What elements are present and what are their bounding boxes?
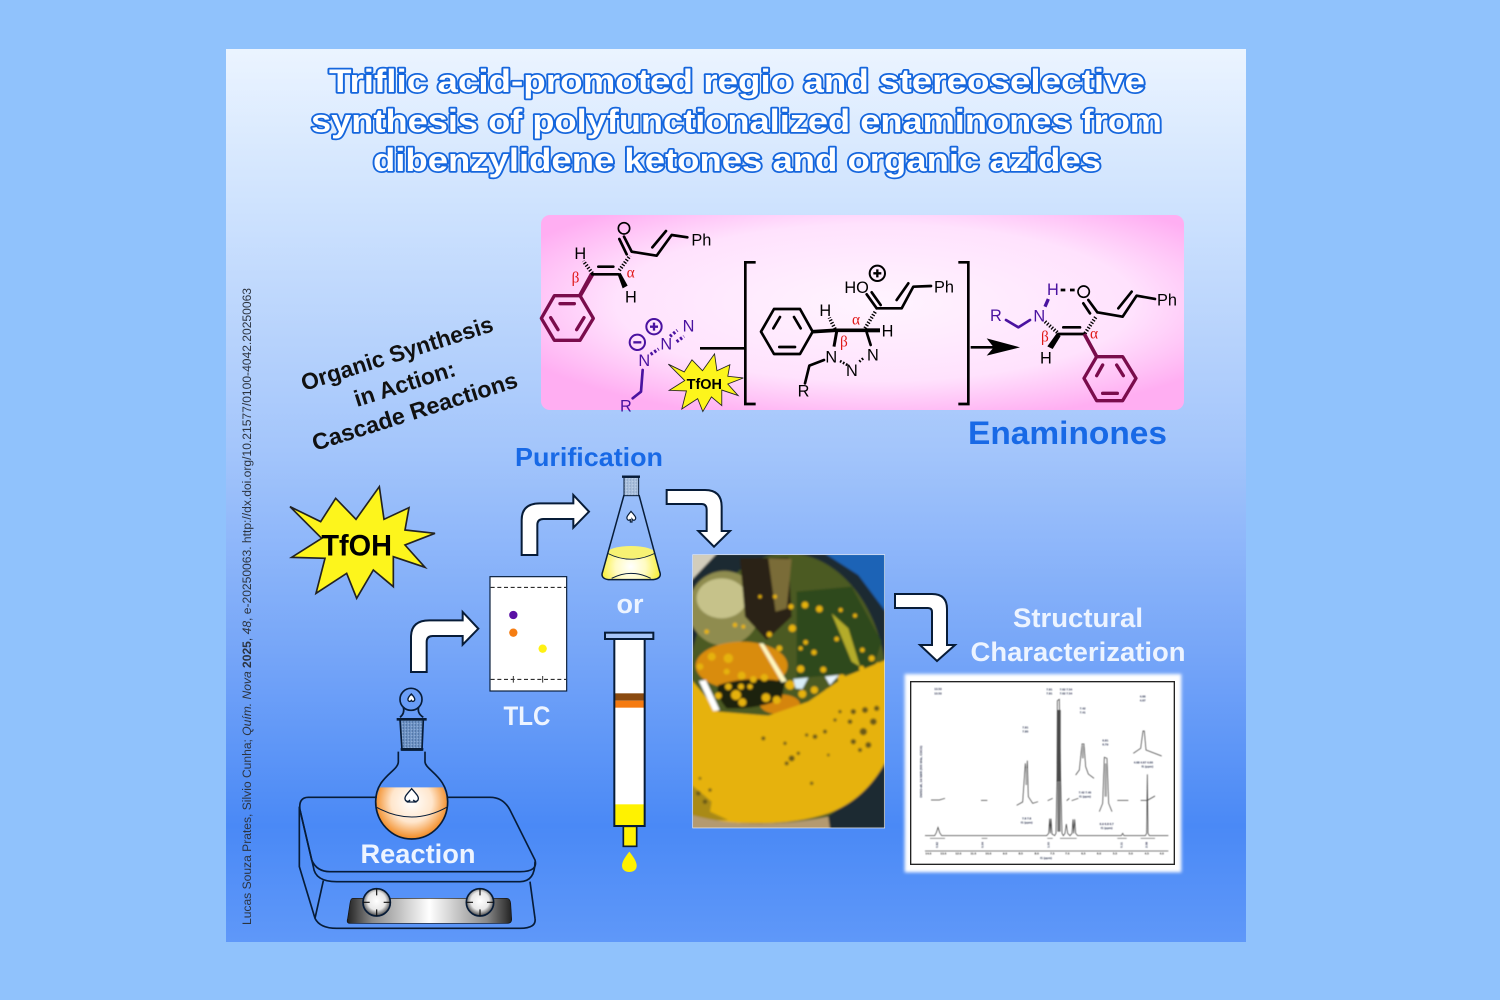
peak labels: 13.53 (934, 692, 942, 696)
starburst: TfOH large (290, 487, 435, 598)
heading: Structural Characterization: Characterization (970, 637, 1186, 667)
x axis ticks: f1 (ppm) (1040, 856, 1052, 860)
peak labels: 0.04 (980, 842, 984, 848)
heading: Structural Characterization (970, 603, 1186, 667)
peak labels: 6.79 (1102, 742, 1109, 746)
peak labels: 4.68 4.67 4.66 (1134, 760, 1153, 764)
tagline: cascade reactions (298, 311, 521, 456)
enaminone product (990, 281, 1177, 401)
enaminone product: α (1090, 325, 1098, 342)
x axis ticks: 12.0 (955, 851, 962, 855)
chromatography column (605, 633, 653, 872)
organic azide (620, 318, 694, 415)
x axis ticks: 6.5 (1081, 851, 1086, 855)
arrow: purification to product (667, 490, 730, 547)
organic azide: N (683, 318, 694, 336)
x axis ticks: 7.0 (1065, 851, 1070, 855)
x axis ticks: 11.0 (971, 851, 976, 855)
left bracket (745, 262, 756, 404)
peak labels: 13.53 (934, 687, 942, 691)
triazoline intermediate (761, 266, 954, 401)
peak labels: 7.80 (1022, 730, 1029, 734)
main trace (925, 699, 1168, 851)
enaminone product: H (1040, 349, 1052, 367)
x axis ticks: 14.0 (925, 851, 932, 855)
NMR spectrum (905, 674, 1181, 872)
label: TLC: TLC (504, 701, 550, 731)
enaminone product: Ph (1157, 292, 1177, 310)
starburst: TfOH small (668, 354, 743, 412)
x axis ticks: 7.5 (1050, 851, 1055, 855)
photo: yellow product in flask (688, 553, 887, 829)
x axis ticks: 8.0 (1035, 851, 1039, 855)
label: or: or (616, 589, 644, 619)
spectrum frame (911, 682, 1174, 864)
peak labels: f1 (ppm) (1141, 764, 1153, 768)
tagline: cascade reactions: in Action: (351, 355, 459, 412)
peak labels: 7.81 (1022, 726, 1029, 730)
panel: reaction scheme (541, 215, 1184, 415)
reaction arrow (971, 338, 1020, 356)
panel: gradient background (226, 49, 1246, 942)
triazoline intermediate: α (852, 311, 860, 328)
right bracket (958, 262, 968, 404)
enaminone product: H (1047, 281, 1059, 299)
dibenzylidene ketone: α (627, 264, 635, 281)
round-bottom flask (376, 688, 448, 843)
heading: Purification: Purification (515, 442, 663, 472)
x axis ticks: 10.0 (985, 851, 992, 855)
reaction line (700, 344, 744, 352)
spectrum glow frame (905, 674, 1181, 872)
peak labels: f1 (ppm) (1101, 826, 1113, 830)
pink panel background (541, 215, 1184, 410)
peak labels: 1.00 (1047, 842, 1051, 848)
peak labels: 4.66 (1140, 694, 1146, 698)
peak labels (919, 687, 1153, 848)
peak labels: 6.9 6.8 6.7 (1100, 822, 1114, 826)
peak labels: 0.11 (1120, 842, 1124, 848)
TLC plate (490, 577, 567, 691)
x axis ticks: 5.0 (1129, 851, 1133, 855)
triazoline intermediate: N (867, 347, 879, 365)
starburst: TfOH small: TfOH (687, 377, 722, 393)
title: Triflic acid-promoted regio and stereoselective (329, 63, 1145, 99)
x axis ticks: 6.0 (1097, 851, 1101, 855)
peak labels: 7.62 7.54 (1060, 692, 1073, 696)
hot plate and reaction flask (299, 688, 536, 928)
enaminone product: R (990, 307, 1002, 325)
peak labels: 2.08 (1144, 842, 1148, 848)
peak labels: 0.92 (935, 842, 939, 848)
peak labels: 7.42 7.40 (1079, 790, 1092, 794)
triazoline intermediate: β (840, 333, 848, 350)
peak labels: DMSO-d6, 1H NMR (500 MHz, CDCl3) (919, 746, 923, 798)
title (311, 63, 1162, 178)
title: dibenzylidene ketones and organic azides (373, 142, 1101, 178)
title: synthesis of polyfunctionalized enaminones from (311, 103, 1162, 139)
peak labels: f1 (ppm) (1021, 820, 1033, 824)
hot plate (299, 797, 536, 928)
triazoline intermediate: HO (844, 279, 869, 297)
workflow graphics (411, 477, 730, 872)
dibenzylidene ketone: Ph (691, 231, 711, 249)
spectrum contents (919, 687, 1168, 860)
starburst: TfOH large: TfOH (321, 529, 392, 562)
peak labels: 7.62 7.54 (1060, 688, 1073, 692)
dibenzylidene ketone: H (574, 245, 586, 263)
dibenzylidene ketone (541, 223, 711, 340)
Erlenmeyer flask (602, 477, 660, 580)
peak labels: 6.81 (1102, 738, 1109, 742)
heading: Structural Characterization: Structural (1013, 603, 1143, 633)
triazoline intermediate: H (882, 323, 893, 341)
triazoline intermediate: Ph (934, 278, 954, 296)
triazoline intermediate: N (825, 348, 837, 366)
peak labels: 7.42 (1080, 706, 1086, 710)
organic azide: R (620, 397, 632, 415)
peak labels: 7.81 (1046, 692, 1053, 696)
tagline: cascade reactions: Cascade Reactions (309, 367, 521, 456)
x axis ticks: 9.0 (1003, 851, 1007, 855)
x axis ticks (925, 851, 1164, 860)
tagline: cascade reactions: Organic Synthesis (298, 311, 496, 396)
inset peaks (1017, 731, 1162, 812)
triazoline intermediate: R (798, 383, 810, 401)
label: Reaction: Reaction (360, 839, 476, 869)
organic azide: N (660, 335, 672, 353)
heading: Enaminones: Enaminones (968, 415, 1167, 451)
scheme drawing (541, 223, 1177, 415)
arrow: TLC to purification (522, 495, 589, 555)
organic azide: N (638, 352, 650, 370)
arrow: reaction to TLC (411, 612, 478, 672)
x axis ticks: 4.5 (1145, 851, 1149, 855)
peak labels: 4.67 (1140, 698, 1146, 702)
x axis ticks: 5.5 (1113, 851, 1117, 855)
citation text: Lucas Souza Prates, Silvio Cunha; Quím. Nova 2025, 48, e-20250063. http://dx.doi.org/10.21577/0100-4042.20250063 (242, 288, 254, 925)
peak labels: 7.41 (1080, 710, 1086, 714)
x axis ticks: 13.0 (940, 851, 947, 855)
peak labels: f1 (ppm) (1079, 794, 1091, 798)
peak labels: 7.81 (1046, 688, 1053, 692)
dibenzylidene ketone: H (625, 288, 637, 306)
peak labels: 7.8 7.8 (1022, 816, 1032, 820)
triazoline intermediate: N (846, 362, 858, 380)
arrow: to structural characterization (895, 594, 955, 661)
x axis ticks: 8.5 (1019, 851, 1023, 855)
x axis ticks: 4.0 (1160, 851, 1164, 855)
enaminone product: N (1033, 308, 1045, 326)
dibenzylidene ketone: β (572, 269, 580, 286)
enaminone product: β (1041, 329, 1049, 346)
triazoline intermediate: H (819, 302, 831, 320)
